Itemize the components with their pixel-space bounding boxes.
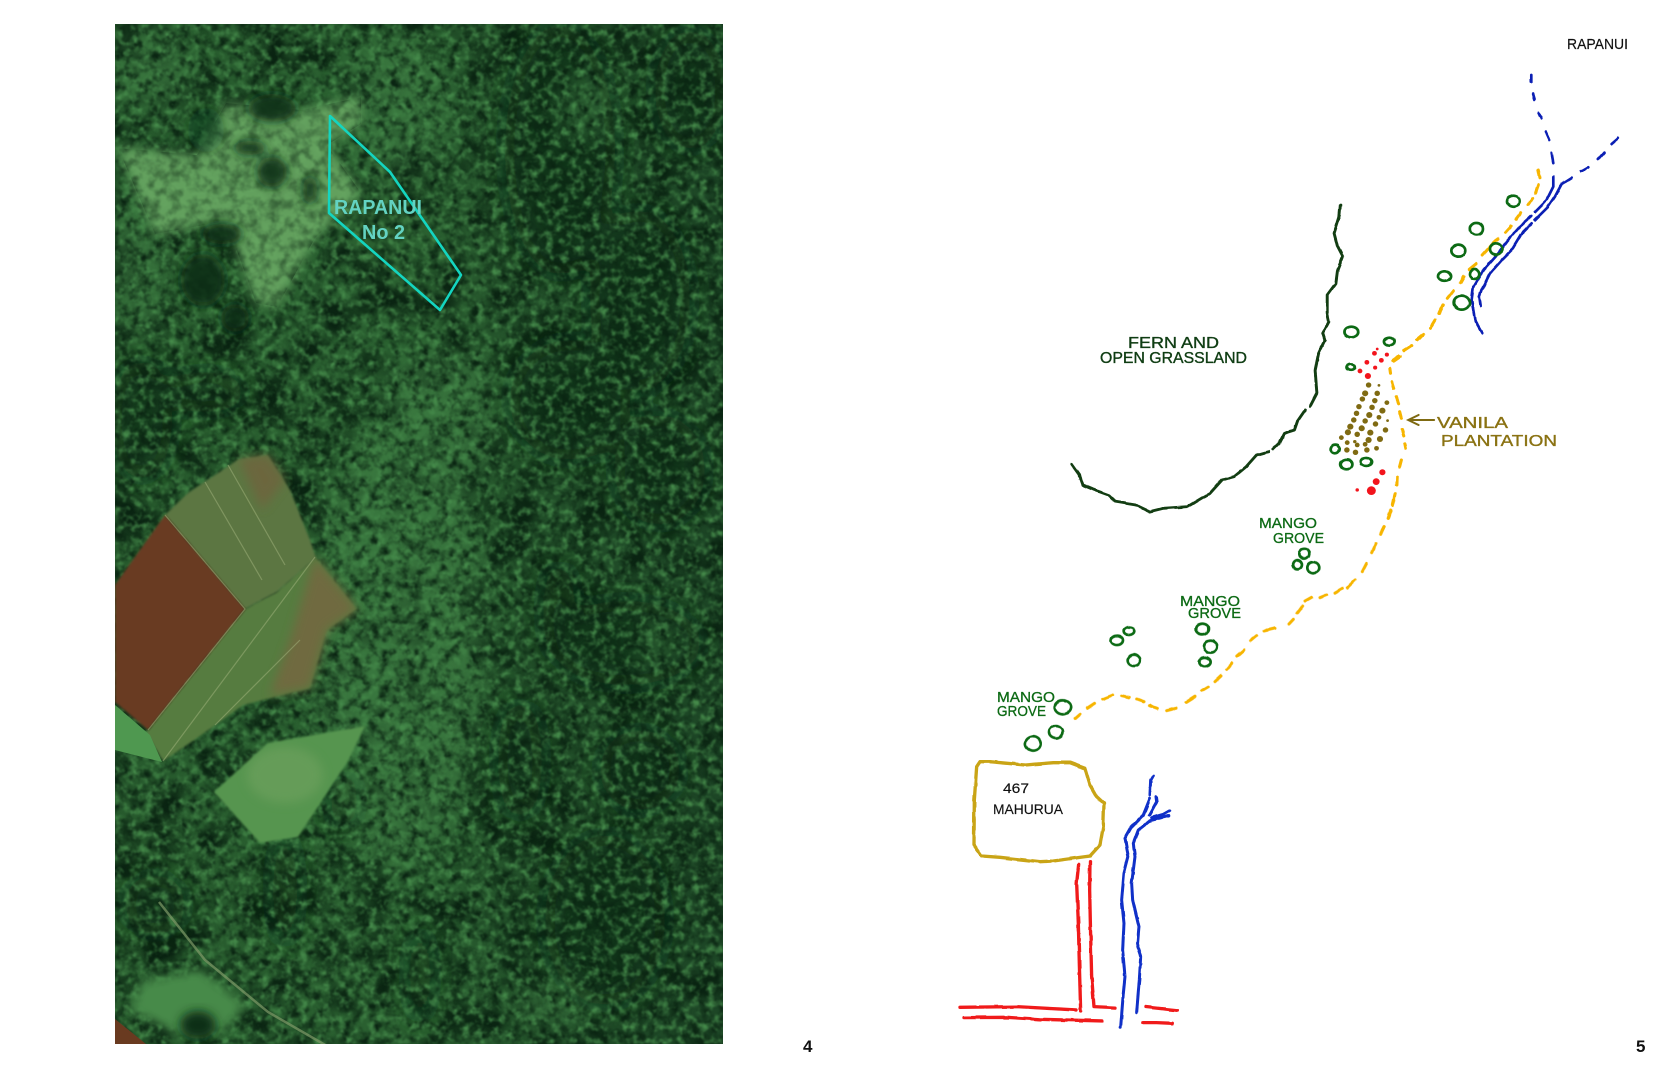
footpath yellow dashed bbox=[1075, 170, 1540, 718]
label: mango grove middle: MANGO bbox=[1180, 593, 1240, 610]
road red bbox=[960, 862, 1177, 1023]
village label bbox=[993, 780, 1064, 817]
brown corner field bbox=[115, 1019, 146, 1044]
brown field top strip bbox=[239, 455, 285, 510]
label: fern and open grassland: OPEN GRASSLAND bbox=[1100, 350, 1247, 367]
photo label bbox=[335, 200, 421, 239]
panel: aerial photograph bbox=[110, 24, 725, 1046]
canopy texture light bbox=[115, 24, 723, 1044]
label: fern and open grassland: FERN AND bbox=[1128, 335, 1219, 352]
light grass paddock bbox=[214, 726, 365, 843]
red dots bbox=[1355, 348, 1389, 495]
label: mango grove lower: MANGO bbox=[997, 689, 1055, 706]
label: mango grove upper: GROVE bbox=[1273, 530, 1324, 547]
river north with dashed branches bbox=[1472, 75, 1618, 333]
darker forest masses bbox=[112, 25, 725, 1025]
canopy clump mottling bbox=[115, 24, 723, 1044]
label: mango grove upper: MANGO bbox=[1259, 515, 1317, 532]
label: mango grove middle: GROVE bbox=[1188, 605, 1241, 622]
map title: RAPANUI bbox=[1567, 36, 1628, 53]
page number 4: 4 bbox=[803, 1037, 813, 1056]
dark tree clumps in clearing bbox=[181, 94, 317, 332]
label: vanilla plantation bbox=[1437, 415, 1557, 450]
label: mango grove lower: GROVE bbox=[997, 703, 1046, 720]
rust edge of field bbox=[270, 557, 357, 695]
label: vanilla plantation: VANILA bbox=[1437, 415, 1508, 432]
vanilla arrow bbox=[1408, 415, 1434, 425]
vanilla plantation dots bbox=[1339, 382, 1389, 455]
field boundary lines bbox=[148, 465, 315, 761]
clearing at top left bbox=[118, 97, 361, 307]
page number 5: 5 bbox=[1636, 1037, 1645, 1056]
photo label: RAPANUI bbox=[334, 197, 422, 219]
label: mango grove lower bbox=[997, 689, 1055, 720]
label: vanilla plantation: PLANTATION bbox=[1441, 433, 1557, 450]
site boundary polygon bbox=[329, 116, 461, 310]
panel: hand-drawn map bbox=[960, 36, 1628, 1027]
village label: MAHURUA bbox=[993, 801, 1064, 817]
village label: 467 bbox=[1003, 780, 1029, 796]
label: mango grove middle bbox=[1180, 593, 1241, 622]
village boundary yellow bbox=[974, 762, 1104, 862]
river south blue bbox=[1121, 776, 1169, 1027]
label: mango grove upper bbox=[1259, 515, 1324, 547]
canopy texture dark bbox=[115, 24, 723, 1044]
forest canopy base bbox=[115, 24, 723, 1044]
brown ploughed field bbox=[115, 515, 245, 730]
striped field bbox=[165, 455, 316, 609]
clearing texture bbox=[119, 98, 361, 307]
label: fern and open grassland bbox=[1100, 335, 1247, 367]
garden clearing and road bbox=[130, 970, 247, 1037]
lower field margin bbox=[146, 557, 357, 761]
trees: green circles bbox=[1025, 196, 1520, 751]
tree line boundary dark green bbox=[1071, 205, 1343, 512]
light corner strip bbox=[115, 705, 162, 762]
lighter forest column bbox=[110, 30, 680, 1020]
photo label: No 2 bbox=[362, 222, 405, 244]
